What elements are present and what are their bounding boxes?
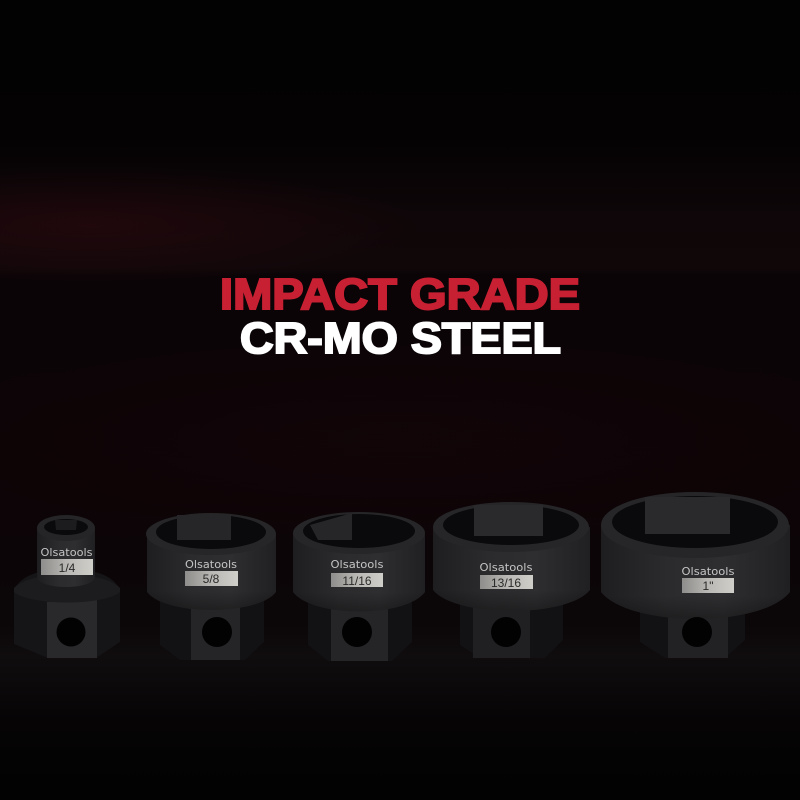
socket 1 inch: Olsatools <box>682 566 734 578</box>
socket 13/16: Olsatools <box>480 562 532 574</box>
socket 5/8 <box>146 513 276 660</box>
socket 11/16: Olsatools <box>330 559 384 571</box>
socket 11/16 <box>293 512 425 661</box>
socket 1 inch <box>601 492 790 658</box>
title <box>220 270 580 363</box>
socket 1/4: Olsatools <box>40 547 92 559</box>
socket 11/16: 11/16 <box>342 574 372 588</box>
socket 1 inch: 1" <box>703 579 713 593</box>
socket 5/8: 5/8 <box>203 572 220 586</box>
socket 5/8: Olsatools <box>185 559 237 571</box>
title line 2: cr-mo steel: CR-MO STEEL <box>240 314 561 363</box>
socket 13/16: 13/16 <box>491 576 521 590</box>
socket 1/4: 1/4 <box>59 561 76 575</box>
socket 1/4 <box>14 515 120 658</box>
title line 1: impact grade: IMPACT GRADE <box>220 270 580 319</box>
socket 13/16 <box>433 502 590 658</box>
